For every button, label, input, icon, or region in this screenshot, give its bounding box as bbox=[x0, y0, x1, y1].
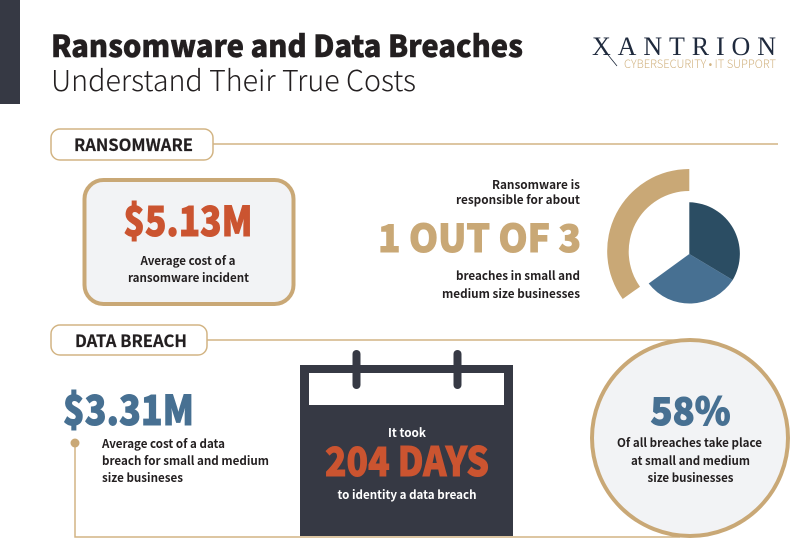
logo: CYBERSECURITY • IT SUPPORT bbox=[624, 56, 776, 72]
chart: one out of three pie bbox=[607, 169, 740, 304]
calendar panel: 204 DAYS bbox=[325, 430, 489, 488]
section header: data breach bbox=[51, 325, 207, 355]
ransomware statistic text: breaches in small and bbox=[456, 267, 580, 284]
corner accent bar bbox=[0, 0, 20, 104]
panel: ransomware cost: ransomware incident bbox=[128, 269, 249, 286]
panel: 58 percent circle: at small and medium bbox=[631, 452, 750, 469]
data breach cost: breach for small and medium bbox=[102, 452, 269, 469]
panel: 58 percent circle: Of all breaches take place bbox=[617, 434, 762, 451]
logo: XANTRION bbox=[592, 32, 776, 61]
calendar panel: It took bbox=[388, 424, 427, 441]
data breach cost: Average cost of a data bbox=[101, 435, 225, 452]
calendar panel: to identity a data breach bbox=[338, 486, 476, 503]
ransomware statistic text: 1 OUT OF 3 bbox=[378, 208, 581, 263]
panel: ransomware cost: Average cost of a bbox=[140, 252, 236, 269]
panel: 58 percent circle bbox=[592, 340, 788, 536]
data breach cost bbox=[63, 377, 269, 486]
title: Ransomware and Data Breaches bbox=[51, 22, 523, 66]
panel: ransomware cost: $5.13M bbox=[124, 188, 252, 248]
section header: data breach: DATA BREACH bbox=[75, 328, 187, 352]
ransomware statistic text bbox=[378, 176, 581, 302]
ransomware statistic text: medium size businesses bbox=[442, 285, 580, 302]
connector lines bbox=[75, 340, 680, 537]
data breach cost: $3.31M bbox=[63, 377, 194, 437]
calendar panel bbox=[300, 350, 513, 536]
subtitle: Understand Their True Costs bbox=[51, 58, 416, 100]
panel: ransomware cost bbox=[84, 180, 294, 304]
ransomware statistic text: Ransomware is bbox=[492, 176, 580, 193]
ransomware statistic text: responsible for about bbox=[456, 191, 580, 208]
section header: ransomware: RANSOMWARE bbox=[74, 132, 193, 156]
section header: ransomware bbox=[51, 129, 778, 160]
data breach cost: size busineses bbox=[102, 469, 183, 486]
panel: 58 percent circle: 58% bbox=[650, 381, 730, 436]
panel: 58 percent circle: size businesses bbox=[648, 469, 734, 486]
